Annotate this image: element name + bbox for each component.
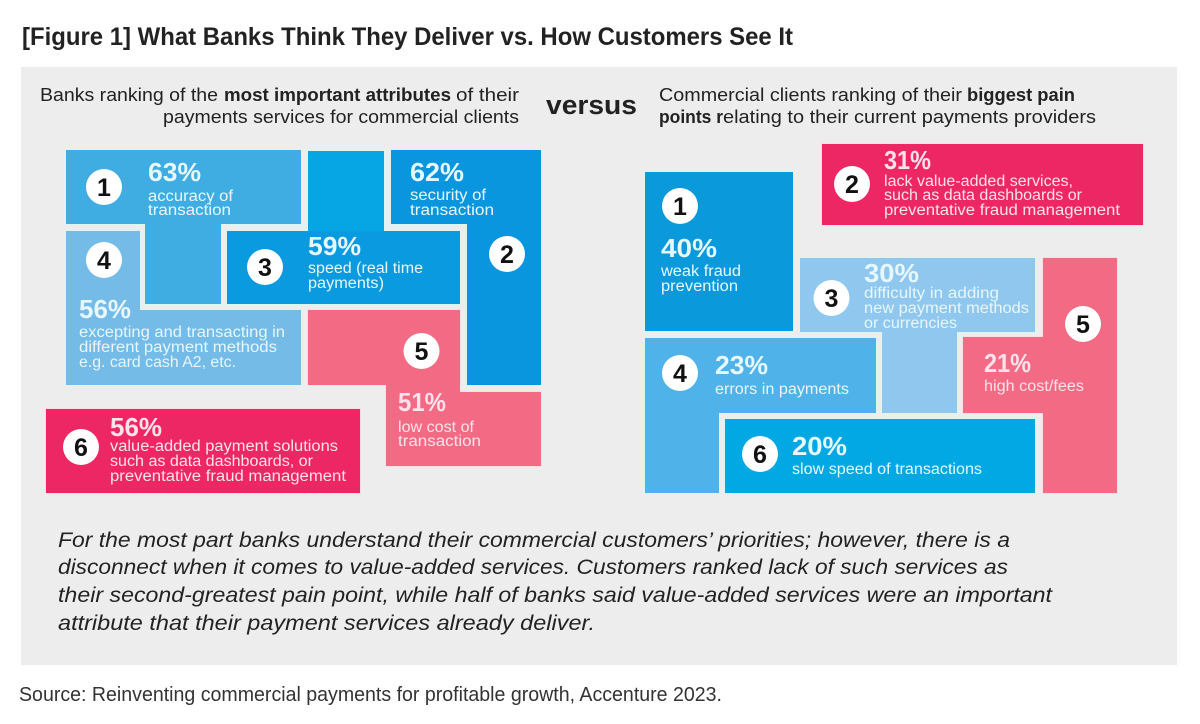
block: left rank 2 security: security of <box>410 187 487 204</box>
panel: banks ranking blocks <box>46 150 541 493</box>
right heading: commercial clients ranking: Commercial clients ranking of their <box>659 85 962 105</box>
block: right rank 1 fraud: weak fraud <box>660 263 741 280</box>
block: right rank 1 fraud: 1 <box>673 193 687 221</box>
block: left rank 3 speed: speed (real time <box>308 260 423 277</box>
block: right rank 2 value-added <box>822 144 1143 225</box>
block: right rank 4 errors: 4 <box>673 360 687 388</box>
block: left rank 1 accuracy: 63% <box>148 157 201 187</box>
block: left rank 4 excepting <box>66 231 301 385</box>
left heading: banks ranking <box>40 85 519 127</box>
block: left rank 2 security: 62% <box>410 157 464 187</box>
commentary paragraph: For the most part banks understand their commercial customers’ priorities; however, there is a <box>58 528 1010 552</box>
block: right rank 2 value-added: 2 <box>845 171 859 199</box>
block: right rank 6 slow speed: 6 <box>753 441 767 469</box>
block: right rank 1 fraud: 40% <box>661 233 717 263</box>
block: left rank 6 value-added: 6 <box>74 434 88 462</box>
commentary paragraph <box>58 528 1053 635</box>
block: right rank 3 difficulty <box>800 258 1035 413</box>
block: right rank 3 difficulty: 30% <box>864 258 919 288</box>
block: left rank 5 low cost: low cost of <box>398 419 475 436</box>
block: right rank 3 difficulty: 3 <box>825 285 838 313</box>
block: left rank 4 excepting: e.g. card cash A2, etc. <box>79 354 236 371</box>
block: left rank 4 excepting: excepting and transacting in <box>79 324 285 341</box>
block: left rank 1 accuracy: accuracy of <box>148 188 234 205</box>
commentary paragraph: their second-greatest pain point, while half of banks said value-added services were an important <box>58 583 1053 607</box>
block: left rank 3 speed: 3 <box>258 254 272 282</box>
block: left rank 2 security <box>391 150 541 385</box>
block: right rank 1 fraud <box>645 172 793 331</box>
block: left rank 6 value-added: 56% <box>110 412 162 442</box>
block: right rank 2 value-added: such as data dashboards or <box>884 187 1082 204</box>
block: right rank 1 fraud: prevention <box>661 278 738 295</box>
block: right rank 4 errors <box>645 338 876 493</box>
block: left rank 3 speed: payments) <box>308 275 384 292</box>
block: left rank 1 accuracy: 1 <box>97 174 111 202</box>
block: right rank 3 difficulty: difficulty in adding <box>864 285 999 302</box>
block: left rank 6 value-added <box>46 409 360 493</box>
block: left rank 4 excepting: 56% <box>79 294 131 324</box>
block: left rank 2 security: transaction <box>410 202 494 219</box>
block: left rank 3 speed <box>227 151 460 304</box>
block: left rank 1 accuracy <box>66 150 301 304</box>
left heading: banks ranking: of their <box>456 85 519 105</box>
block: left rank 6 value-added: such as data dashboards, or <box>110 453 313 470</box>
background panel <box>21 67 1177 665</box>
block: left rank 5 low cost <box>308 310 541 466</box>
block: right rank 4 errors: 23% <box>715 350 768 380</box>
block: right rank 5 high cost: high cost/fees <box>984 378 1084 395</box>
source line: Source: Reinventing commercial payments for profitable growth, Accenture 2023. <box>19 684 722 706</box>
right heading: commercial clients ranking <box>659 85 1096 127</box>
commentary paragraph: attribute that their payment services already deliver. <box>58 611 595 635</box>
block: left rank 6 value-added: value-added payment solutions <box>110 438 338 455</box>
versus label: versus <box>546 90 637 120</box>
left heading: banks ranking: payments services for commercial clients <box>163 107 519 127</box>
block: left rank 3 speed: 59% <box>308 231 361 261</box>
block: left rank 5 low cost: 5 <box>415 338 429 366</box>
left heading: banks ranking: Banks ranking of the <box>40 85 218 105</box>
title: [Figure 1] What Banks Think They Deliver vs. How Customers See It <box>22 23 794 51</box>
commentary paragraph: disconnect when it comes to value-added services. Customers ranked lack of such services as <box>58 555 1008 579</box>
right heading: commercial clients ranking: points r <box>659 107 723 127</box>
block: left rank 4 excepting: 4 <box>97 247 111 275</box>
block: right rank 6 slow speed: 20% <box>792 431 847 461</box>
block: right rank 6 slow speed <box>725 419 1035 493</box>
block: right rank 2 value-added: lack value-added services, <box>884 173 1073 190</box>
block: right rank 3 difficulty: or currencies <box>864 315 957 332</box>
block: left rank 5 low cost: 51% <box>398 387 446 417</box>
block: right rank 5 high cost: 21% <box>984 348 1031 378</box>
block: right rank 3 difficulty: new payment methods <box>864 300 1029 317</box>
block: left rank 5 low cost: transaction <box>398 433 481 450</box>
block: left rank 1 accuracy: transaction <box>148 202 231 219</box>
block: right rank 6 slow speed: slow speed of transactions <box>792 461 982 478</box>
block: left rank 4 excepting: different payment methods <box>79 339 277 356</box>
block: right rank 2 value-added: 31% <box>884 145 931 175</box>
block: right rank 5 high cost <box>963 258 1117 493</box>
left heading: banks ranking: most important attributes <box>224 85 451 105</box>
block: right rank 5 high cost: 5 <box>1076 311 1090 339</box>
right heading: commercial clients ranking: elating to their current payments providers <box>723 107 1096 127</box>
block: right rank 4 errors: errors in payments <box>715 381 849 398</box>
right heading: commercial clients ranking: biggest pain <box>967 85 1075 105</box>
block: right rank 2 value-added: preventative fraud management <box>884 202 1121 219</box>
block: left rank 2 security: 2 <box>500 241 514 269</box>
panel: commercial clients ranking blocks <box>645 144 1143 493</box>
block: left rank 6 value-added: preventative fraud management <box>110 468 347 485</box>
